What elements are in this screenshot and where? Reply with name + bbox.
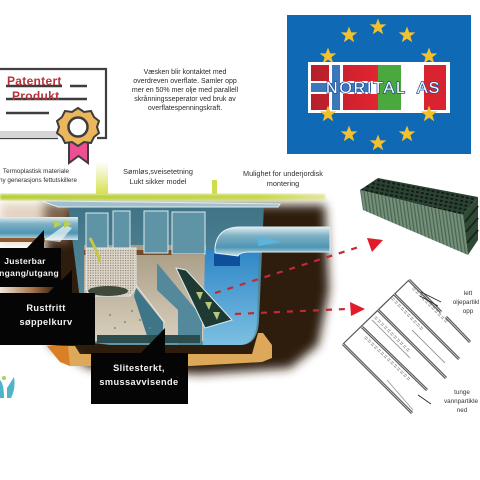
red dashed arrow lines bbox=[215, 246, 362, 293]
certificate: Patentert Produkt bbox=[0, 69, 106, 163]
label: underground: montering bbox=[267, 179, 299, 188]
baffles bbox=[86, 211, 205, 254]
logo: Norital AS flag bbox=[287, 15, 471, 154]
label: material: Termoplastisk materiale bbox=[3, 168, 70, 175]
label: light oil particles bbox=[453, 290, 479, 315]
label: seal bbox=[123, 167, 193, 186]
callout: stainless basket bbox=[0, 270, 95, 345]
callout: adjustable inlet: Justerbar bbox=[4, 256, 46, 266]
label: seal: Lukt sikker model bbox=[130, 177, 187, 186]
icon: ring of stars bbox=[320, 18, 437, 150]
soil bbox=[44, 205, 329, 374]
panel: Norway and Italy flags bbox=[308, 62, 450, 113]
lamella pack in tank bbox=[157, 263, 202, 345]
label: light oil particles: oljepartikl bbox=[453, 299, 479, 306]
blue outlet cap bbox=[214, 253, 240, 266]
text block: description: Væsken blir kontaktet med bbox=[144, 69, 227, 76]
icon: hands with plant bbox=[0, 376, 15, 398]
panel: underground tank cutaway bbox=[0, 194, 362, 374]
certificate title: Patentert bbox=[7, 74, 62, 88]
callout: dirt repellent bbox=[91, 328, 188, 404]
logo text: AS bbox=[417, 80, 440, 97]
heading labels on white tabs bbox=[0, 162, 323, 194]
oil droplets bbox=[365, 288, 447, 380]
label: light oil particles: lett bbox=[464, 290, 472, 297]
label: material bbox=[0, 168, 78, 184]
outlet pipe bbox=[215, 227, 330, 256]
strainer basket bbox=[86, 248, 136, 296]
text block: description: overflatespenningskraft. bbox=[148, 105, 222, 112]
certificate: Patentert Produkt: Produkt bbox=[12, 89, 59, 103]
callout: stainless basket: søppelkurv bbox=[19, 317, 73, 327]
text block: description: mer en 50% mer olje med parallell bbox=[132, 87, 239, 94]
label: underground: Mulighet for underjordisk bbox=[243, 169, 323, 178]
diagram: parallel plates bbox=[343, 280, 470, 413]
band strip between callouts bbox=[0, 287, 54, 293]
label: heavy water particles: vannpartikle bbox=[444, 398, 478, 405]
icon: lower stars bbox=[320, 106, 437, 121]
text block: description bbox=[132, 69, 239, 112]
sand base bbox=[47, 333, 272, 366]
image: green lamella block bbox=[360, 178, 478, 255]
label: heavy water particles: ned bbox=[457, 407, 468, 414]
callout: stainless basket: Rustfritt bbox=[26, 303, 66, 313]
label: material: ny generasjons fettutskillere bbox=[0, 177, 78, 184]
rim bbox=[42, 201, 280, 207]
tank body bbox=[68, 205, 264, 345]
callout: adjustable inlet bbox=[0, 230, 61, 287]
label: light oil particles: opp bbox=[463, 308, 474, 315]
sediment bbox=[97, 335, 200, 343]
arrow: lower red arrowhead bbox=[350, 302, 365, 316]
text block: description: overdreven overflate. Samler opp bbox=[133, 78, 237, 85]
logo text: NORITAL bbox=[326, 80, 407, 97]
label: underground bbox=[243, 169, 323, 188]
water chamber bbox=[203, 250, 259, 345]
arrow: upper red arrowhead bbox=[367, 238, 383, 252]
label: seal: Sømløs,sveisetetning bbox=[123, 167, 193, 176]
inlet pipe bbox=[0, 217, 78, 240]
grass band bbox=[0, 194, 325, 200]
text block: description: skrånningsseperator ved bruk av bbox=[134, 95, 236, 103]
label: heavy water particles bbox=[444, 389, 478, 414]
callout: dirt repellent: smussavvisende bbox=[99, 377, 179, 387]
icon: ribbon seal bbox=[57, 108, 99, 163]
callout: dirt repellent: Slitesterkt, bbox=[113, 363, 165, 373]
label: heavy water particles: tunge bbox=[454, 389, 470, 396]
